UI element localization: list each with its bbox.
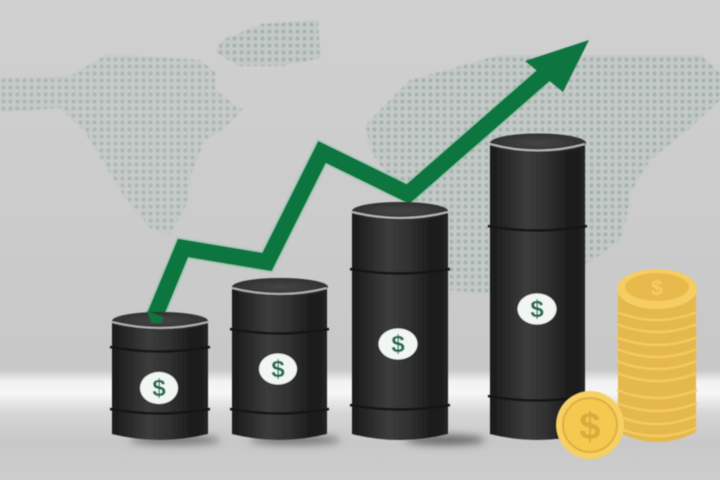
dollar label: $ xyxy=(152,375,166,402)
dollar label: $ xyxy=(530,296,544,323)
map: Eurasia and Africa xyxy=(366,55,720,300)
arrowhead xyxy=(525,40,589,92)
dollar label xyxy=(518,294,556,324)
coin stack: $ xyxy=(651,277,663,300)
map: Greenland xyxy=(216,20,320,66)
barrel 1 xyxy=(110,311,220,445)
dollar label: $ xyxy=(391,331,405,358)
barrel 2 xyxy=(230,278,340,445)
top coin xyxy=(617,269,697,309)
coin stack xyxy=(616,269,698,442)
map: North and South America xyxy=(0,54,243,235)
barrel 3 xyxy=(350,202,485,445)
dollar label xyxy=(259,354,297,384)
front coin xyxy=(556,391,624,459)
dollar label xyxy=(378,328,418,360)
world map xyxy=(0,20,720,300)
dollar label: $ xyxy=(271,356,285,383)
front coin: $ xyxy=(579,406,601,448)
growth arrow xyxy=(154,40,589,318)
barrel 4 xyxy=(488,134,587,440)
